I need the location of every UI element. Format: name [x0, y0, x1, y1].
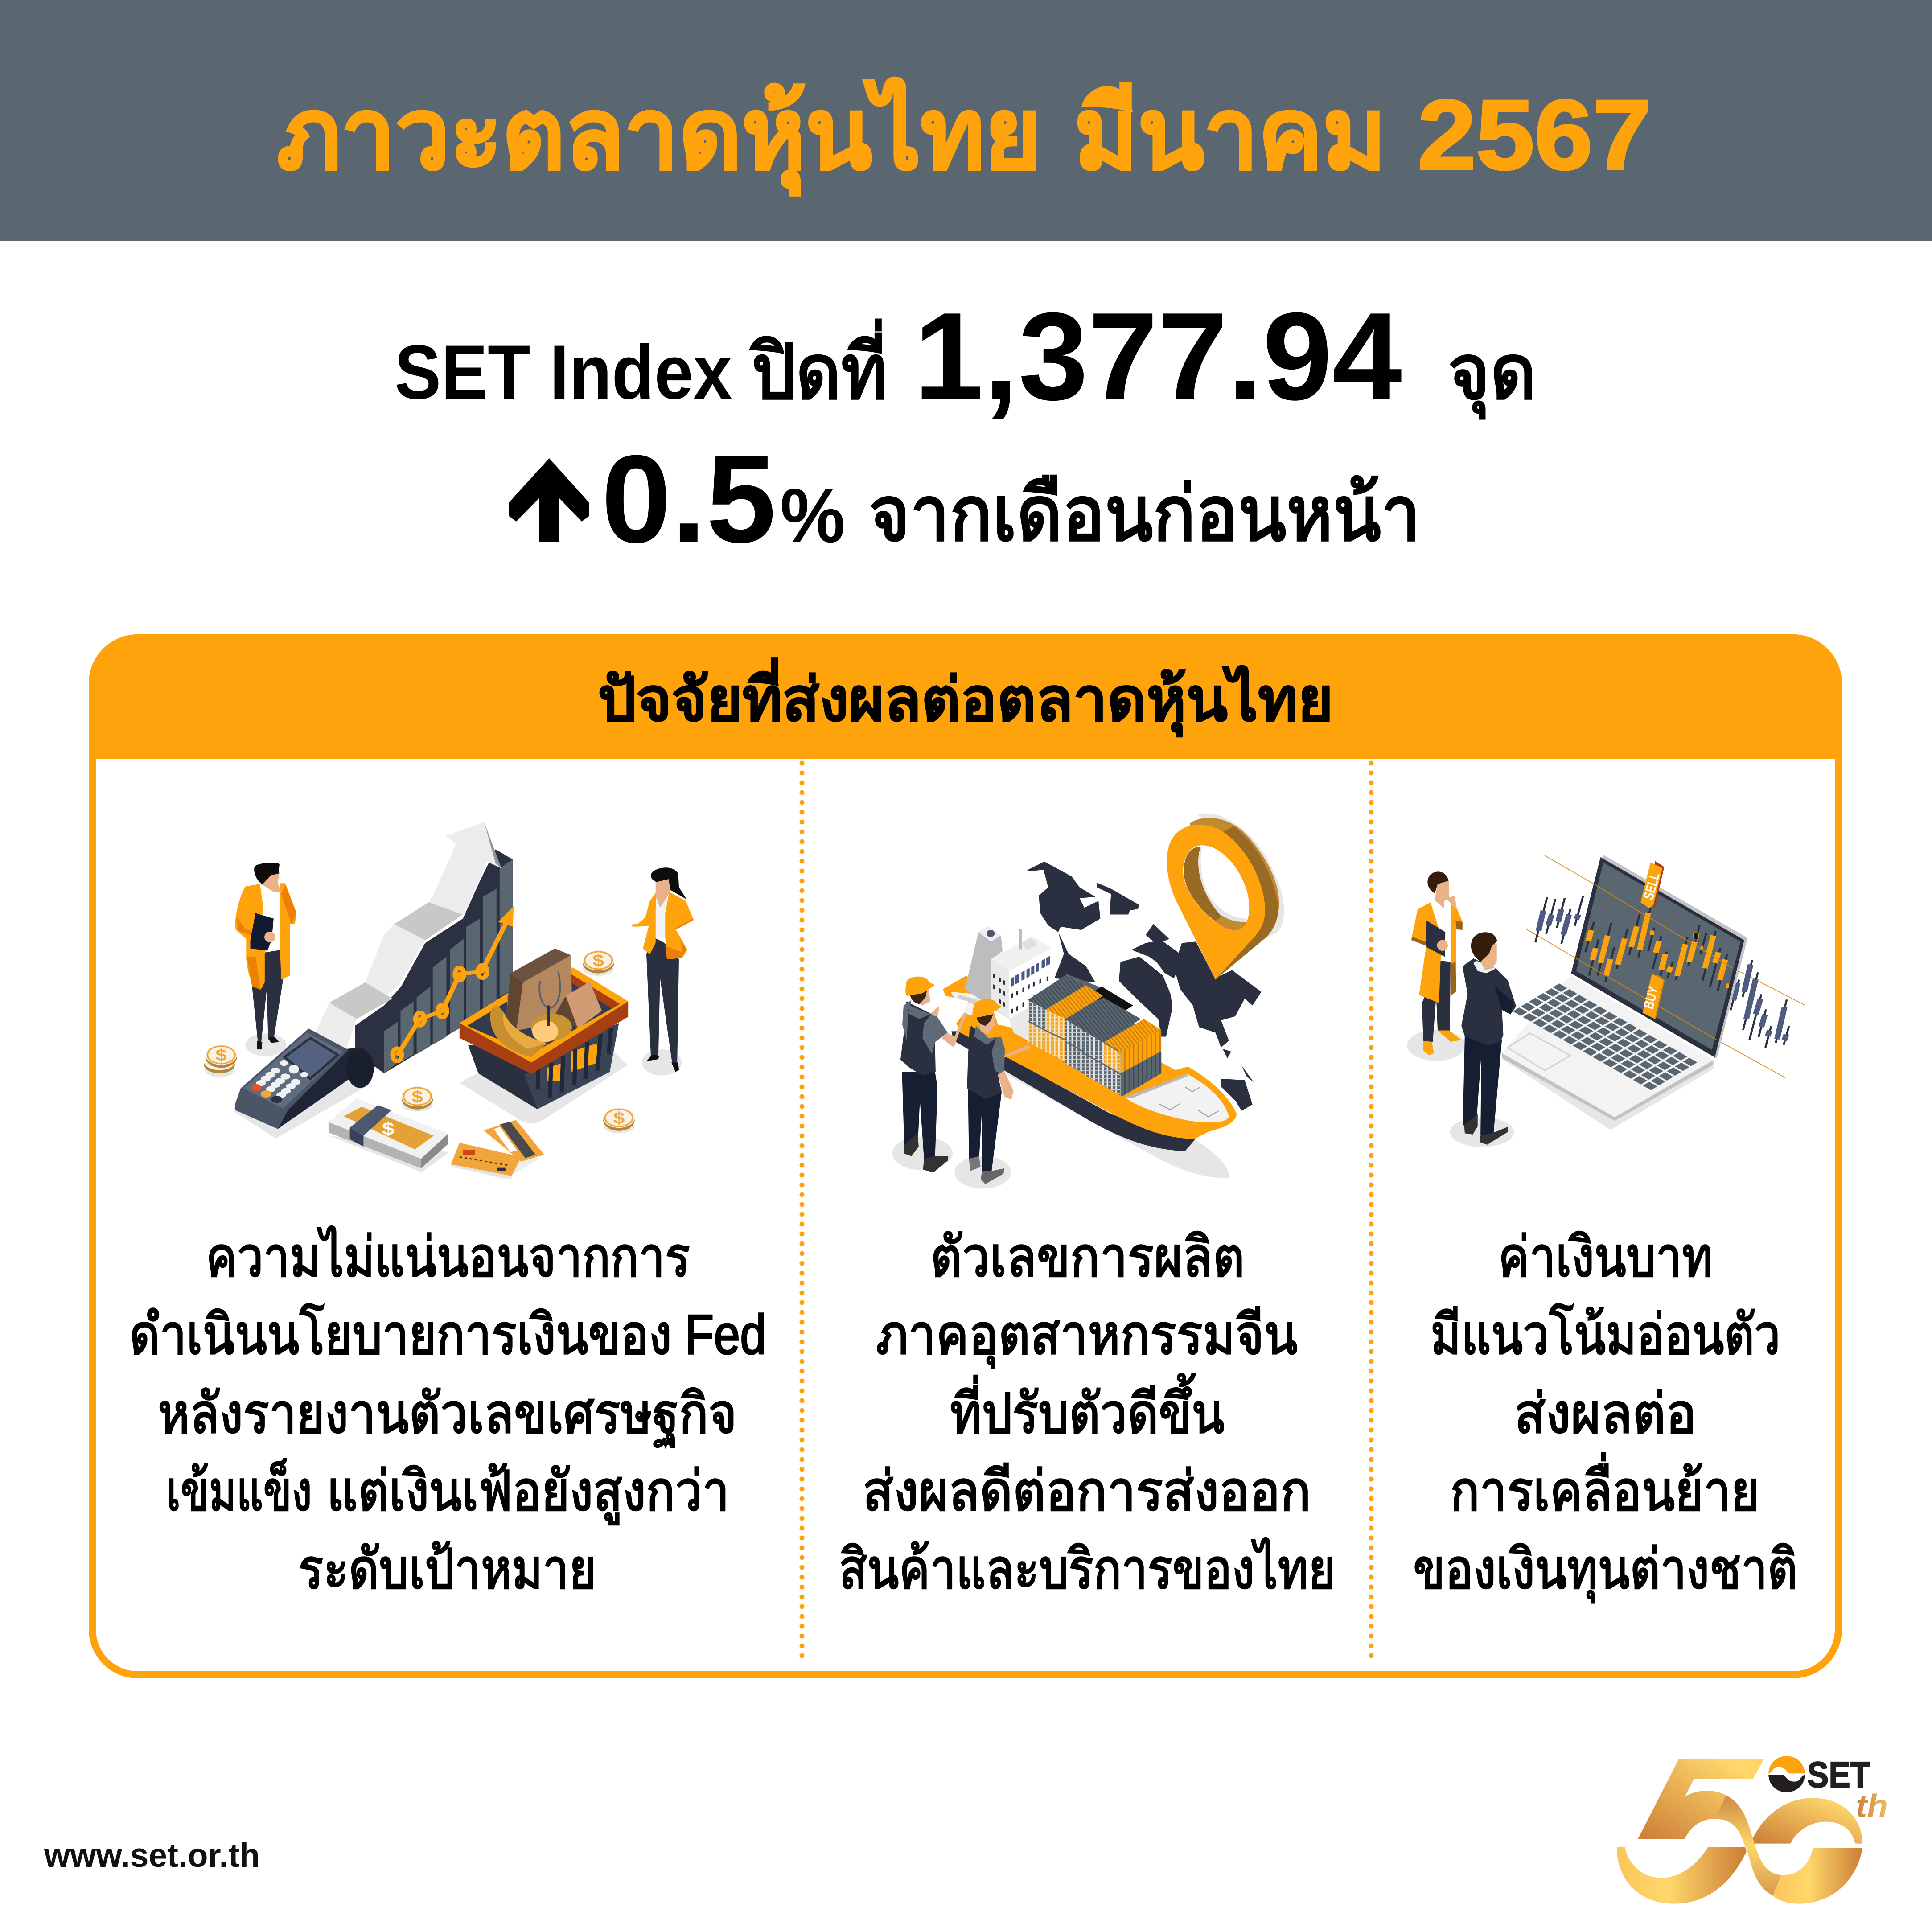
- SET Index value line: SET Index ปิดที่: [395, 318, 887, 415]
- panel: factors: [89, 634, 1842, 1675]
- title: ภาวะตลาดหุ้นไทย: [277, 77, 1041, 196]
- logo: SET 50th: SET: [1807, 1755, 1870, 1795]
- text: factor three: มีแนวโน้มอ่อนตัว: [1431, 1303, 1780, 1366]
- man in dark suit: [1461, 932, 1516, 1145]
- text: factor two: ตัวเลขการผลิต: [930, 1226, 1245, 1288]
- logo: SET 50th: th: [1856, 1788, 1888, 1824]
- buy tag: BUY: [1640, 984, 1662, 1010]
- worker right: [938, 995, 1031, 1184]
- coins: $: [592, 951, 604, 970]
- man with tablet: [235, 863, 296, 1049]
- header band: [0, 0, 1932, 241]
- icon: up arrow: [509, 458, 589, 542]
- coins: [204, 950, 635, 1131]
- text: factor three: ค่าเงินบาท: [1498, 1226, 1713, 1288]
- title: [277, 77, 1651, 196]
- text: factor one: ความไม่แน่นอนจากการ: [206, 1226, 690, 1288]
- text: factor two: ภาคอุตสาหกรรมจีน: [876, 1304, 1298, 1369]
- banknote bundle: $: [382, 1118, 395, 1139]
- shadows: [1407, 1030, 1715, 1147]
- buy tag: [1640, 974, 1665, 1019]
- logo: SET 50th: [1617, 1755, 1888, 1904]
- orange trend line: [393, 906, 514, 1061]
- website url: www.set.or.th: [44, 1837, 260, 1874]
- text: factor two: ที่ปรับตัวดีขึ้น: [950, 1373, 1225, 1445]
- bar columns: [355, 849, 513, 1073]
- shadows: [204, 962, 682, 1179]
- chart candlesticks on screen: [1576, 884, 1732, 1040]
- text: factor one: เข้มแข็ง: [166, 1458, 312, 1522]
- SET Index value line: [395, 287, 1537, 426]
- panel heading: ปัจจัยที่ส่งผลต่อตลาดหุ้นไทย: [598, 657, 1333, 737]
- receipt paper arrow: [316, 822, 501, 1049]
- banknote bundle: [329, 1098, 448, 1168]
- SET Index value line: จุด: [1448, 329, 1537, 420]
- ship superstructure: [965, 926, 1052, 1041]
- text: factor three: ของเงินทุนต่างชาติ: [1413, 1538, 1798, 1603]
- cargo containers: [1028, 974, 1161, 1096]
- sell tag: SELL: [1640, 872, 1663, 901]
- text: factor two: ส่งผลดีต่อการส่งออก: [863, 1460, 1311, 1522]
- text: factor two: [839, 1226, 1336, 1600]
- keyboard: [1511, 982, 1699, 1091]
- text: factor three: ส่งผลต่อ: [1514, 1383, 1697, 1445]
- text: factor one: [129, 1226, 766, 1600]
- text: factor one: แต่เงินเฟ้อยังสูงกว่า: [327, 1460, 729, 1525]
- change from previous month line: [509, 430, 1421, 569]
- world map: [1027, 862, 1261, 1111]
- worker left: [900, 977, 967, 1172]
- change from previous month line: จากเดือนก่อนหน้า: [869, 471, 1421, 557]
- coins: $: [613, 1109, 625, 1127]
- coins: $: [215, 1046, 227, 1064]
- sell tag: [1640, 861, 1664, 908]
- change from previous month line: 0.5: [601, 430, 776, 569]
- SET Index value line: 1,377.94: [914, 287, 1403, 426]
- text: factor three: การเคลื่อนย้าย: [1450, 1453, 1759, 1522]
- title: มีนาคม: [1074, 79, 1386, 189]
- laptop: [1502, 855, 1747, 1121]
- text: factor one: ดำเนินนโยบายการเงินของ Fed: [129, 1303, 766, 1366]
- text: factor one: หลังรายงานตัวเลขเศรษฐกิจ: [158, 1383, 737, 1447]
- text: factor two: สินค้าและบริการของไทย: [839, 1538, 1336, 1600]
- ship: [943, 975, 1237, 1151]
- change from previous month line: %: [780, 473, 845, 559]
- text: factor three: [1413, 1226, 1798, 1603]
- trend lines behind: [1525, 855, 1804, 1078]
- illustration: market, receipt chart, shopping basket: [204, 822, 694, 1179]
- illustration: laptop with candlestick chart: [1407, 855, 1804, 1147]
- bank cards: [451, 1120, 544, 1179]
- text: factor one: ระดับเป้าหมาย: [298, 1538, 596, 1600]
- basket: [460, 949, 628, 1109]
- payment terminal: [235, 1028, 375, 1129]
- title: 2567: [1418, 80, 1651, 190]
- woman in orange coat: [1411, 871, 1463, 1055]
- panel heading band: [89, 634, 1842, 759]
- icon: location pin: [1167, 818, 1279, 980]
- outer candlesticks: [1535, 896, 1789, 1048]
- shadows: [892, 814, 1284, 1189]
- woman: [631, 867, 694, 1072]
- illustration: cargo ship and location pin: [892, 814, 1284, 1189]
- coins: $: [411, 1087, 423, 1106]
